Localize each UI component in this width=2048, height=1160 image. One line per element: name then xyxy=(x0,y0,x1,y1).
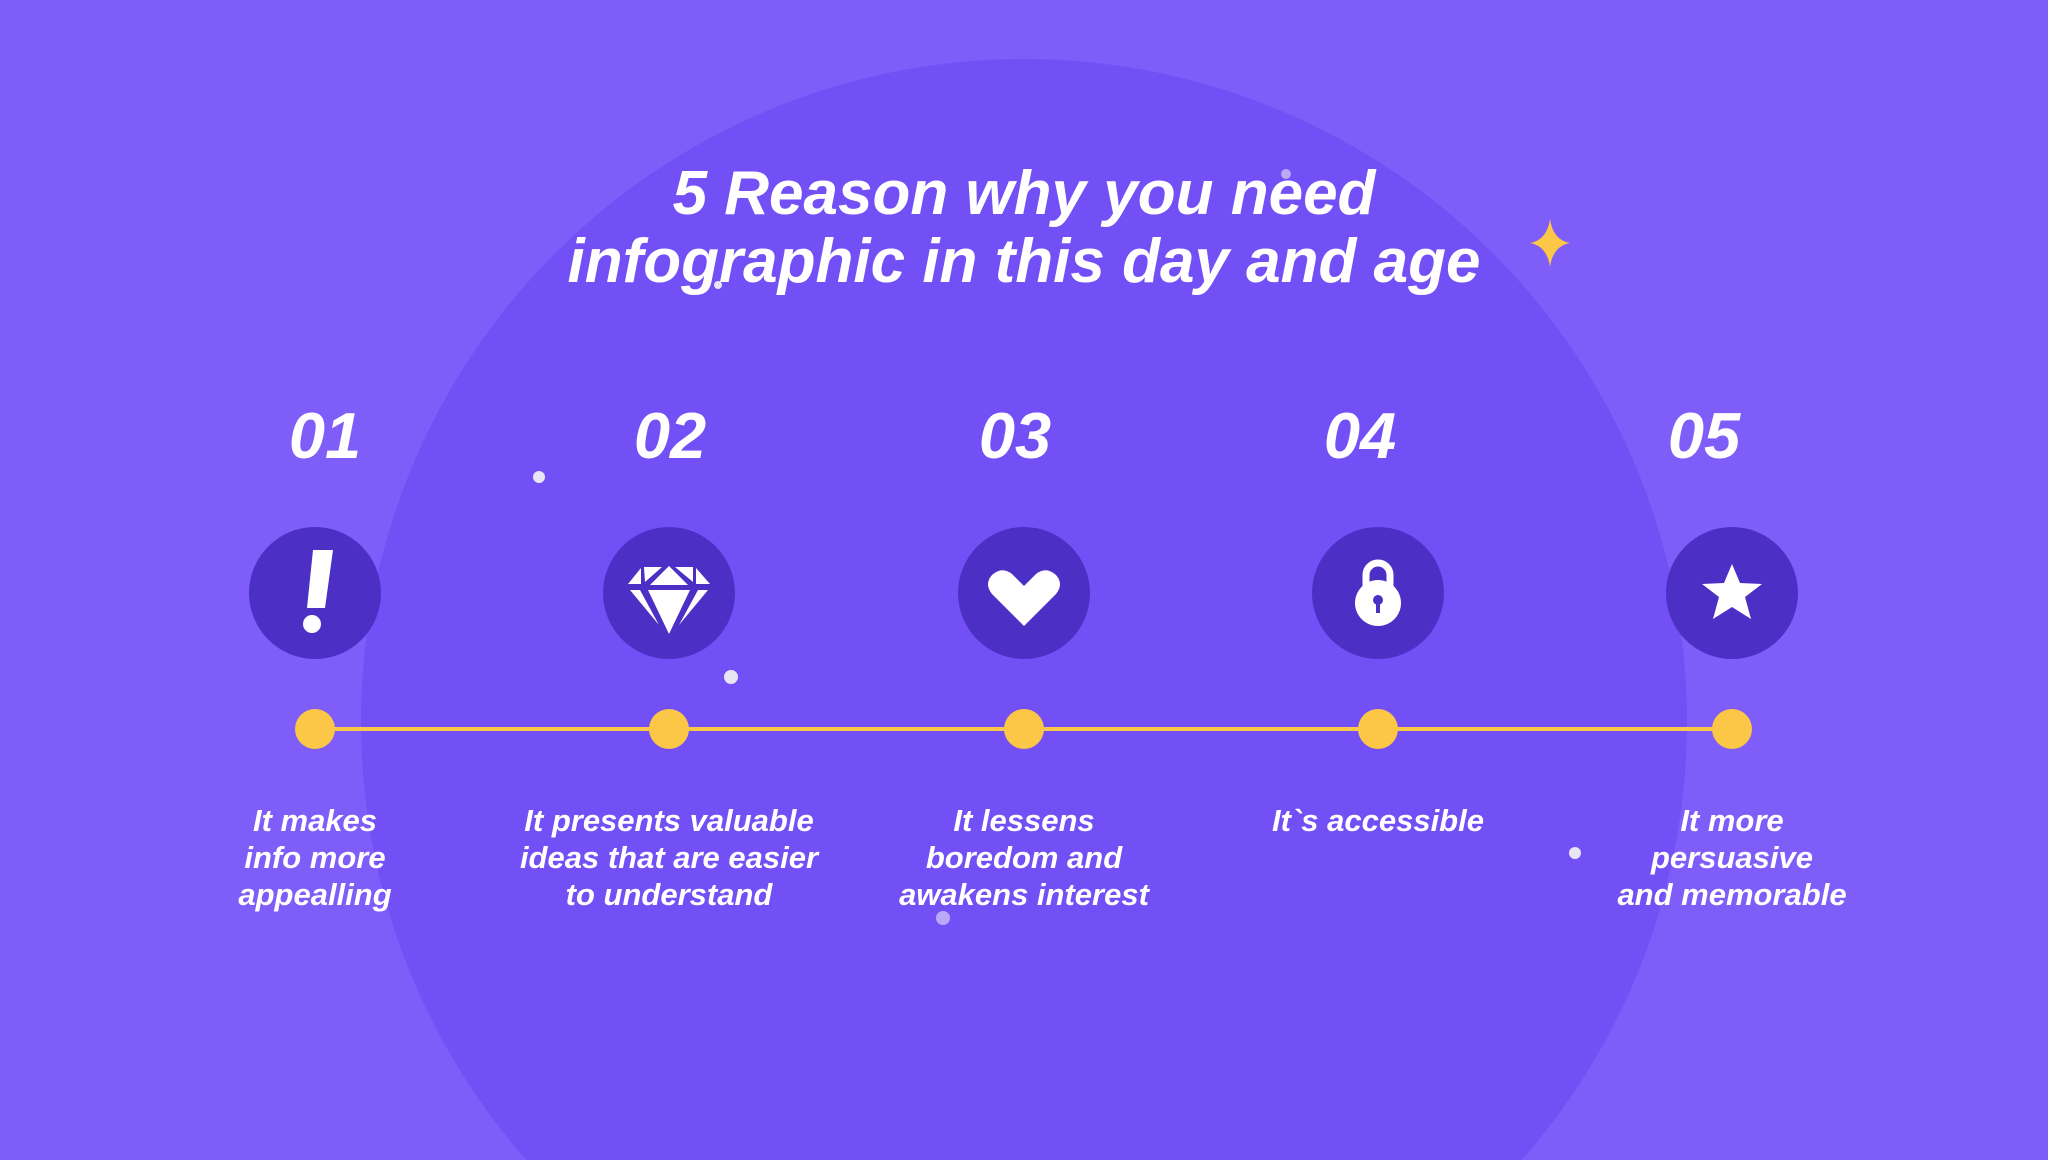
background circle xyxy=(361,59,1687,1160)
icon: sparkle xyxy=(1530,219,1570,267)
descriptions: awakens interest xyxy=(899,877,1151,912)
descriptions: It lessens xyxy=(953,803,1095,838)
numbers: 04 xyxy=(1324,399,1396,472)
title: 5 Reason why you need xyxy=(673,159,1377,228)
descriptions: to understand xyxy=(566,877,773,912)
descriptions xyxy=(238,803,1847,912)
descriptions: boredom and xyxy=(926,840,1123,875)
icon: star xyxy=(1666,527,1798,659)
icon: exclamation xyxy=(249,527,381,659)
numbers: 05 xyxy=(1668,399,1741,472)
descriptions: appealling xyxy=(238,877,392,912)
numbers xyxy=(289,399,1741,472)
numbers: 02 xyxy=(634,399,706,472)
descriptions: info more xyxy=(244,840,386,875)
descriptions: It more xyxy=(1680,803,1784,838)
numbers: 03 xyxy=(979,399,1051,472)
descriptions: persuasive xyxy=(1650,840,1813,875)
icon: heart xyxy=(958,527,1090,659)
numbers: 01 xyxy=(289,399,361,472)
descriptions: It makes xyxy=(253,803,377,838)
decorative dots xyxy=(533,169,1581,925)
descriptions: It presents valuable xyxy=(524,803,814,838)
title xyxy=(568,159,1480,296)
icon: diamond xyxy=(603,527,735,659)
timeline xyxy=(295,709,1752,749)
descriptions: ideas that are easier xyxy=(520,840,820,875)
title: infographic in this day and age xyxy=(568,227,1480,296)
icon: lock xyxy=(1312,527,1444,659)
descriptions: It`s accessible xyxy=(1272,803,1484,838)
descriptions: and memorable xyxy=(1617,877,1847,912)
